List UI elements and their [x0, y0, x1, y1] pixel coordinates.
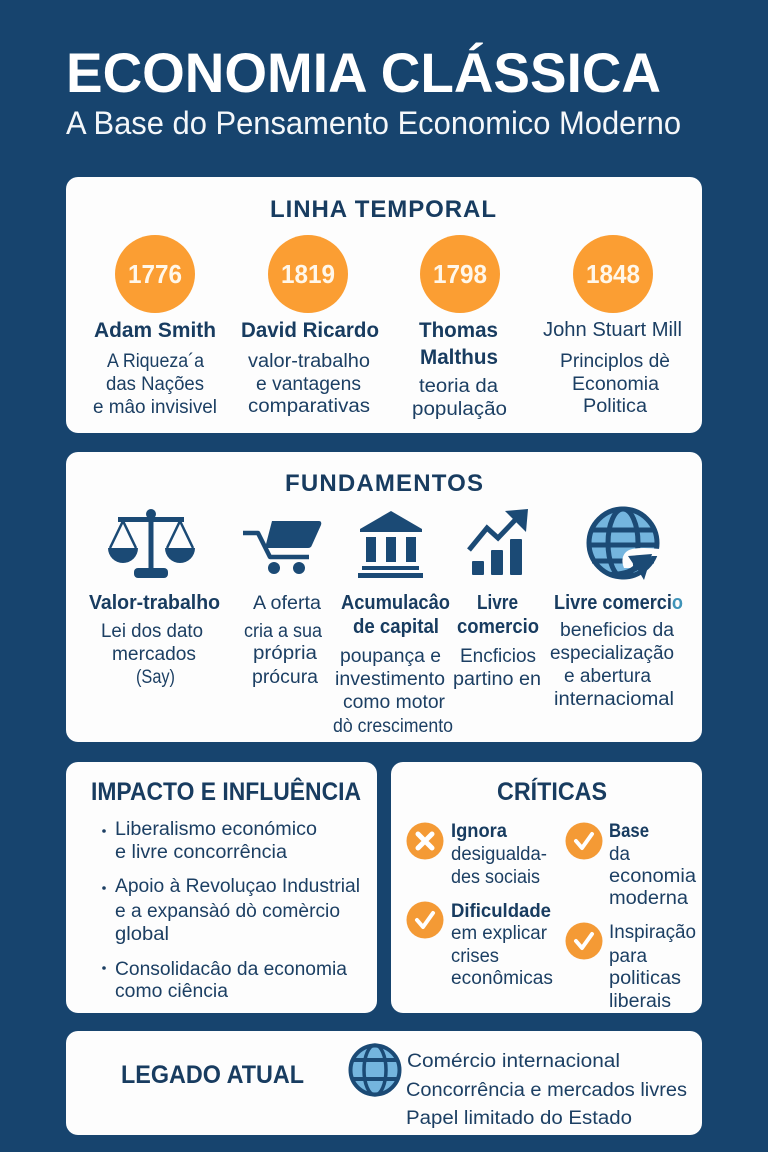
bullet: liberalismo: Liberalismo económico [115, 819, 317, 840]
timeline item: Thomas Malthus [412, 235, 507, 420]
column: acumulação de capital: dò crescimento [333, 716, 453, 737]
header [66, 41, 681, 141]
column: a oferta: cria a sua [244, 621, 322, 642]
timeline item: Thomas Malthus: 1798 [433, 259, 487, 289]
timeline item: Thomas Malthus: Thomas [419, 319, 498, 342]
column: valor-trabalho: Valor-trabalho [89, 592, 220, 614]
bullet: consolidação [102, 959, 347, 1002]
timeline item: Adam Smith: 1776 [128, 259, 182, 289]
heading: legado atual: LEGADO ATUAL [121, 1061, 304, 1089]
bullet: revolução industrial: global [115, 924, 169, 945]
critique: base: Base [609, 821, 649, 842]
critique: ignora: des sociais [451, 867, 540, 888]
timeline item: Adam Smith: das Nações [106, 374, 204, 395]
column: a oferta [243, 521, 322, 688]
column: acumulação de capital: como motor [343, 692, 446, 713]
subtitle: A Base do Pensamento Economico Moderno [66, 105, 681, 141]
column: livre comercio internacional: especialização [550, 643, 674, 664]
critique: inspiração [566, 922, 696, 1012]
column: acumulação de capital: Acumulacâo [341, 592, 450, 614]
bullet: revolução industrial: Apoio à Revoluçao Industrial [115, 876, 360, 897]
critique: ignora [406, 821, 547, 888]
critique: dificuldade: crises [451, 946, 499, 967]
column: valor-trabalho: mercados [112, 644, 196, 665]
icon: globe with arrow [588, 509, 660, 580]
heading: impacto e influência: IMPACTO E INFLUÊNCIA [91, 776, 361, 806]
column: acumulação de capital: poupança e [340, 646, 441, 667]
bullet: revolução industrial [102, 876, 360, 945]
legacy list: Comércio internacional [407, 1051, 620, 1072]
critique: inspiração: Inspiração [609, 922, 696, 943]
title: ECONOMIA CLÁSSICA [66, 41, 661, 104]
column: livre comercio: Encficios [460, 646, 536, 667]
critique: inspiração: politicas [609, 968, 681, 989]
panel: fundamentos [66, 452, 702, 742]
column: livre comercio: comercio [457, 616, 539, 638]
column: acumulação de capital [333, 511, 453, 737]
column: livre comercio internacional [550, 509, 683, 710]
heading: linha temporal: LINHA TEMPORAL [270, 196, 496, 223]
timeline item: David Ricardo: 1819 [281, 259, 335, 289]
timeline item: John Stuart Mill: Principlos dè [560, 351, 670, 372]
legacy list: Concorrência e mercados livres [406, 1080, 687, 1101]
icon: globe [350, 1045, 400, 1095]
critique: base: da [609, 844, 630, 865]
timeline item: Adam Smith: Adam Smith [94, 319, 216, 342]
icon: scales [108, 509, 195, 578]
critique: dificuldade: Dificuldade [451, 901, 551, 922]
timeline item: David Ricardo: David Ricardo [241, 319, 379, 342]
timeline item: David Ricardo: valor-trabalho [248, 351, 370, 372]
column: a oferta: prócura [252, 667, 318, 688]
legacy list: Papel limitado do Estado [406, 1108, 632, 1129]
critique: ignora: Ignora [451, 821, 507, 842]
bullet: consolidação: como ciência [115, 981, 228, 1002]
timeline item: John Stuart Mill: Economia [572, 374, 659, 395]
timeline item: Thomas Malthus: teoria da [419, 376, 498, 397]
bullet: liberalismo [102, 819, 317, 863]
critique: ignora: desigualda- [451, 844, 547, 865]
column: livre comercio [453, 509, 541, 690]
critique: inspiração: liberais [609, 991, 671, 1012]
legacy list [406, 1051, 687, 1129]
panel: impacto e influência [66, 762, 377, 1013]
column: a oferta: própria [253, 643, 317, 664]
column: valor-trabalho: (Say) [136, 667, 175, 688]
bullet: revolução industrial: e a expansàó dò comèrcio [115, 901, 340, 922]
critique: base: moderna [609, 888, 688, 909]
timeline item: Adam Smith: A Riqueza´a [107, 351, 204, 372]
timeline item: Thomas Malthus: população [412, 399, 507, 420]
bullet: liberalismo: e livre concorrência [115, 842, 287, 863]
column: acumulação de capital: de capital [353, 616, 439, 638]
panel: linha temporal [66, 177, 702, 433]
column: livre comercio internacional: e abertura [564, 666, 651, 687]
heading: críticas: CRÍTICAS [497, 777, 607, 806]
timeline item: Adam Smith [93, 235, 217, 418]
column: livre comercio: Livre [477, 592, 518, 614]
critique: dificuldade [406, 901, 553, 989]
icon: shopping cart [243, 521, 321, 574]
timeline item: John Stuart Mill [543, 235, 682, 417]
timeline item: David Ricardo: e vantagens [256, 374, 361, 395]
bullet: consolidação: Consolidacâo da economia [115, 959, 347, 980]
critique: dificuldade: em explicar [451, 923, 548, 944]
column: a oferta: A oferta [253, 593, 321, 614]
timeline item: David Ricardo [241, 235, 379, 417]
timeline item: John Stuart Mill: Politica [583, 396, 647, 417]
critique: base: economia [609, 866, 696, 887]
timeline item: Thomas Malthus: Malthus [420, 346, 498, 369]
timeline item: David Ricardo: comparativas [248, 396, 370, 417]
critique: dificuldade: econômicas [451, 968, 553, 989]
panel: críticas [391, 762, 702, 1013]
column: livre comercio internacional: beneficios da [560, 620, 674, 641]
column: livre comercio: partino en [453, 669, 541, 690]
column: valor-trabalho: Lei dos dato [101, 621, 203, 642]
timeline item: John Stuart Mill: John Stuart Mill [543, 319, 682, 341]
column: valor-trabalho [89, 509, 220, 688]
timeline item: Adam Smith: e mâo invisivel [93, 397, 217, 418]
critique: base [566, 821, 696, 909]
column: livre comercio internacional: Livre comercio [554, 592, 683, 614]
critique: inspiração: para [609, 946, 647, 967]
icon: bank [358, 511, 423, 578]
panel: legado atual [66, 1031, 702, 1135]
column: livre comercio internacional: internaciomal [554, 689, 674, 710]
timeline item: John Stuart Mill: 1848 [586, 259, 640, 289]
column: acumulação de capital: investimento [335, 669, 445, 690]
heading: fundamentos: FUNDAMENTOS [285, 470, 483, 497]
icon: growth chart [469, 509, 528, 575]
